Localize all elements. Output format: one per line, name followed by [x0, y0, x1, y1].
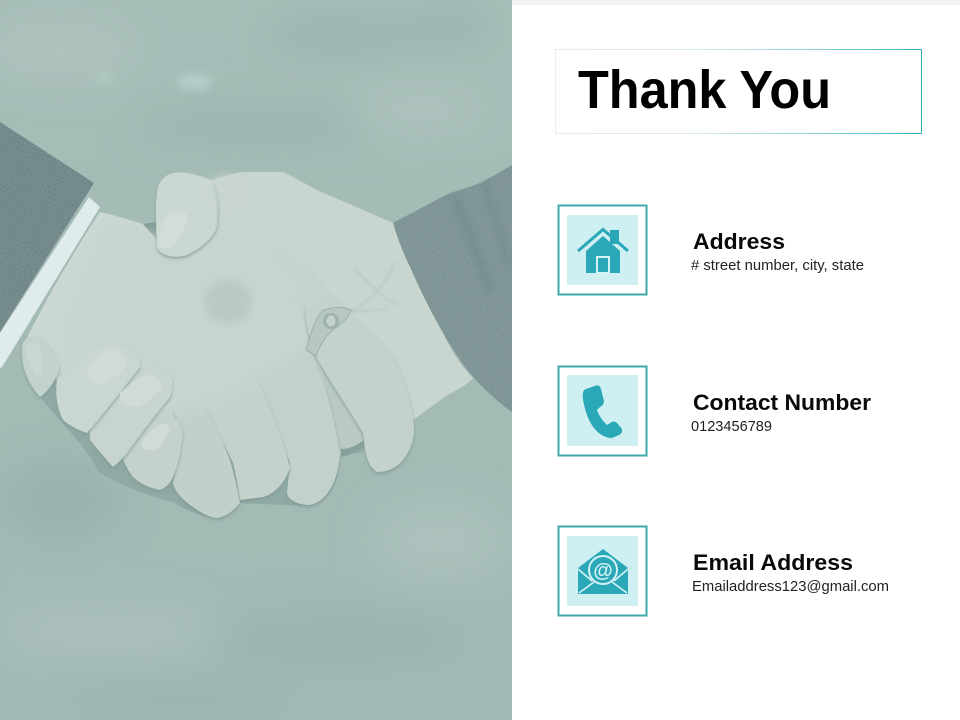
third finger	[220, 376, 292, 502]
fingertip: index finger	[56, 358, 142, 434]
address text: # street number, city, state	[691, 258, 864, 274]
contact item: email	[558, 526, 889, 616]
right sleeve	[393, 165, 512, 412]
photo: handshake	[0, 0, 512, 720]
knuckle mark	[204, 280, 252, 324]
finger nails	[120, 380, 170, 450]
contact item: phone	[558, 366, 871, 456]
icon: envelope	[558, 526, 646, 616]
hands	[22, 172, 473, 518]
left sleeve	[0, 122, 94, 332]
title: Thank You	[578, 60, 831, 120]
phone text: 0123456789	[691, 419, 772, 435]
ring finger top blend	[304, 305, 305, 310]
second finger	[173, 390, 240, 518]
fingertip: middle finger	[90, 367, 172, 467]
title box	[555, 49, 922, 134]
phone heading: Contact Number	[693, 390, 871, 415]
shadow crescent under palm	[341, 440, 364, 457]
back of hand blend	[145, 226, 260, 416]
top strip	[512, 0, 960, 5]
fingertip: little finger	[22, 337, 60, 397]
right hand behind	[156, 172, 473, 420]
left hand back	[26, 212, 328, 420]
palm and hidden hand base	[40, 379, 365, 516]
skin between fourth and ring fingers	[323, 373, 363, 456]
ring finger	[305, 295, 414, 472]
fourth finger	[284, 355, 341, 508]
shirt cuff	[0, 197, 100, 368]
email text: Emailaddress123@gmail.com	[692, 579, 889, 595]
contact item: address	[558, 206, 864, 294]
thumb nail	[157, 211, 187, 248]
thumb	[156, 173, 218, 257]
icon: envelope: @	[593, 560, 613, 582]
fingertip: lower finger	[123, 412, 183, 490]
email heading: Email Address	[693, 550, 853, 575]
address heading: Address	[693, 229, 785, 254]
icon: phone	[558, 366, 646, 456]
icon: house	[558, 206, 646, 294]
ring	[306, 307, 351, 356]
thumb top blend	[211, 173, 232, 198]
